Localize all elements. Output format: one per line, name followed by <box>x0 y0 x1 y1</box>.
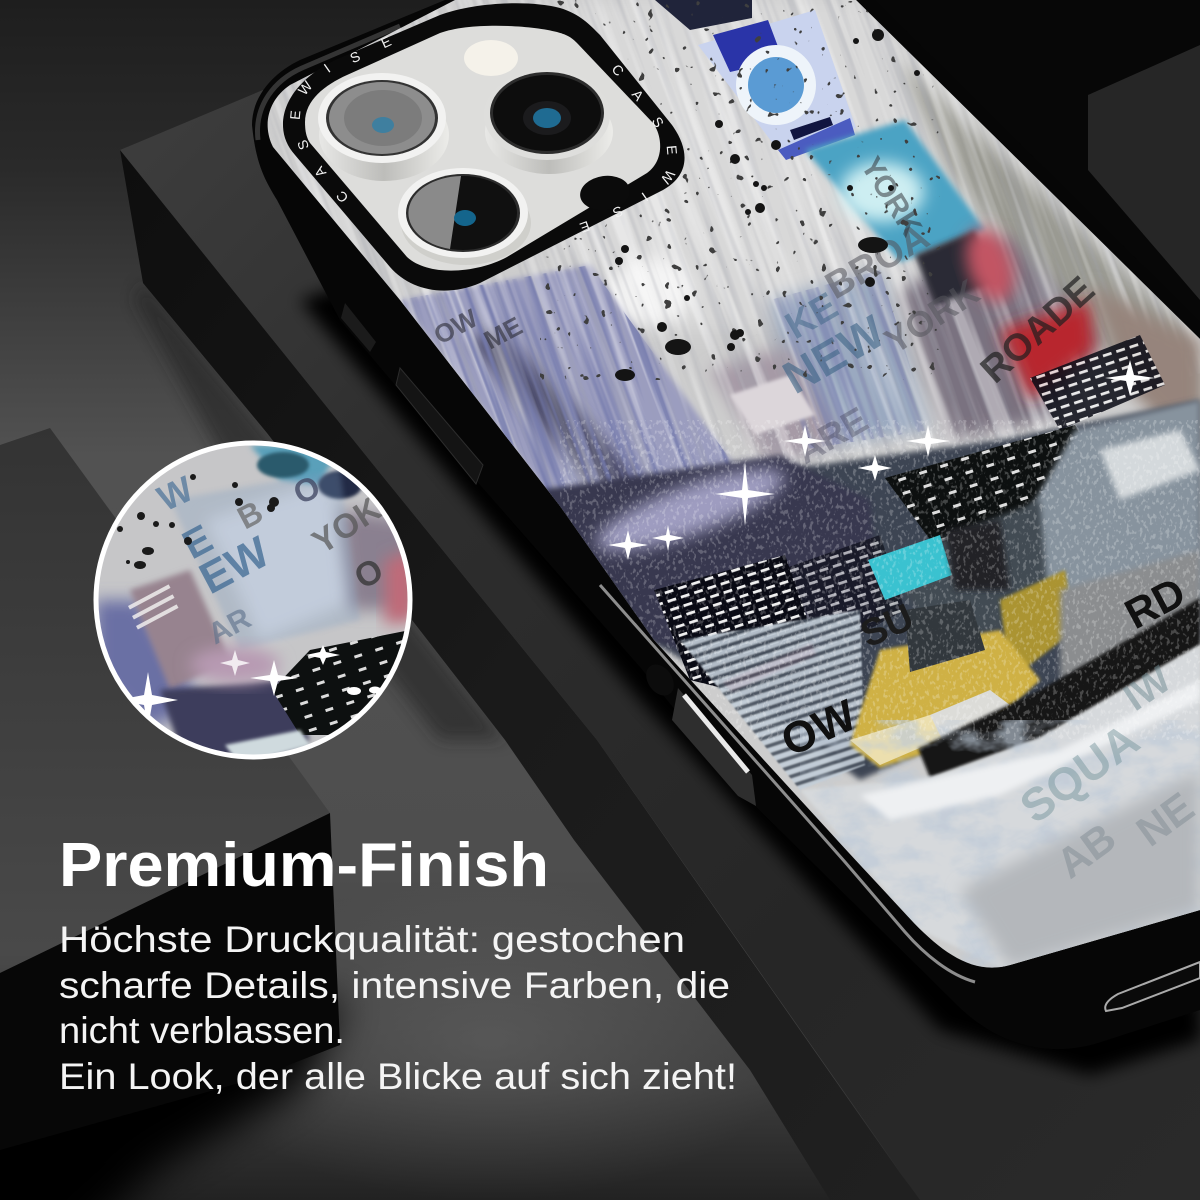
dark mid street <box>940 499 1050 599</box>
circle white bars <box>128 584 178 630</box>
art mid blue column <box>770 270 930 450</box>
brand lettering on ring: W <box>295 77 316 98</box>
circle pink building <box>130 570 230 690</box>
bluish sparkle wash <box>588 453 792 567</box>
brand lettering on ring: A <box>310 163 329 180</box>
grey window block centre <box>789 535 903 644</box>
sparkle lights <box>608 360 1155 560</box>
road grey corner <box>960 770 1200 968</box>
dark top sign <box>655 0 752 30</box>
brand lettering on ring: S <box>294 138 312 152</box>
art dark tower shadow <box>466 324 645 484</box>
left road stripes <box>680 610 865 790</box>
graffiti text: YORK <box>854 151 928 242</box>
taxi <box>850 570 1075 768</box>
graffiti text <box>429 151 1200 887</box>
lower step front <box>0 813 340 1150</box>
pedestal shadow on floor <box>135 283 505 740</box>
white building windows top <box>730 375 815 435</box>
circle base <box>96 443 410 757</box>
art white patch <box>608 258 692 326</box>
dark building band <box>885 425 1080 542</box>
body text <box>59 919 737 1097</box>
circle pink sparkle haze <box>190 647 280 683</box>
window block right <box>1030 335 1165 430</box>
beige brown patch <box>1094 286 1200 412</box>
body line 2: scharfe Details, intensive Farben, die <box>59 965 730 1006</box>
red pink neon <box>957 222 1023 308</box>
title: Premium-Finish <box>59 831 549 900</box>
background: top right dark wall <box>820 0 1200 420</box>
art right grey column <box>902 62 1200 400</box>
circle lower purple street <box>160 680 310 765</box>
circle teal ink blob <box>257 452 309 478</box>
lens two <box>484 70 613 174</box>
mid streak fill <box>774 270 924 448</box>
ink splatter dots <box>615 29 920 381</box>
graffiti text: YORK <box>877 271 987 362</box>
graffiti text: OW <box>774 690 864 766</box>
island window <box>305 26 660 271</box>
phone <box>234 0 1200 1049</box>
brand lettering on ring: E <box>664 145 680 155</box>
night street band left <box>544 451 873 650</box>
circle blue streaks <box>170 470 360 650</box>
teal sign <box>805 120 985 262</box>
side button: chrome power <box>672 688 756 806</box>
graffiti text: SQUA <box>1010 713 1148 833</box>
tower streak fill <box>402 266 729 496</box>
blue sign <box>698 10 856 160</box>
lens one <box>318 73 449 181</box>
chrome button highlight <box>684 695 748 772</box>
brand lettering on ring: S <box>649 114 667 130</box>
circle graffiti: EW <box>192 527 278 604</box>
graffiti text: ME <box>479 310 527 355</box>
circle graffiti: AR <box>203 602 257 651</box>
circle teal top sign <box>250 445 340 485</box>
lens three <box>398 168 531 265</box>
brand lettering on ring: S <box>610 203 626 221</box>
body line 3: nicht verblassen. <box>59 1010 345 1051</box>
background: top right block face <box>1088 45 1200 300</box>
red neon strip <box>724 646 813 690</box>
circle navy blob <box>318 471 362 499</box>
side button: volume <box>396 368 483 484</box>
pedestal dark side face <box>120 150 920 1200</box>
microphone hole <box>578 173 632 213</box>
road blue paint wash <box>800 720 1200 980</box>
circle white diagonal <box>205 480 355 640</box>
brand lettering on ring: W <box>657 167 678 188</box>
streak texture neutral <box>282 0 1112 482</box>
phone shadow <box>300 280 1200 1075</box>
magnified detail circle <box>95 443 415 765</box>
graffiti text: KE <box>778 285 845 348</box>
circle purple left <box>95 600 200 730</box>
art top light wash <box>540 0 1010 330</box>
grey right traffic <box>1060 550 1200 680</box>
circle graffiti <box>151 468 390 651</box>
circle artwork <box>95 445 415 765</box>
teal shop front <box>868 535 952 600</box>
mid right cars <box>1029 399 1200 590</box>
art mid pink building <box>710 345 840 465</box>
circle white outline <box>96 443 410 757</box>
graffiti text: NEW <box>774 305 893 404</box>
phone case body <box>252 0 1200 1049</box>
dark road shadow <box>918 598 1200 778</box>
background: floor light glow <box>180 880 800 1200</box>
light grit over night scene <box>560 420 1200 740</box>
circle sparkles <box>118 645 381 728</box>
case lower edge highlight <box>600 585 975 982</box>
road bright band <box>860 680 1200 820</box>
tower blue streaks <box>402 266 729 496</box>
graffiti text: ROADE <box>973 269 1103 392</box>
circle graffiti: O <box>348 551 390 597</box>
graffiti text: AB <box>1048 814 1124 887</box>
flash <box>464 40 518 76</box>
circle dark street <box>272 630 410 735</box>
body line 1: Höchste Druckqualität: gestochen <box>59 919 685 960</box>
graffiti text: RD <box>1117 568 1193 638</box>
circle graffiti: E <box>176 517 220 568</box>
brand lettering on ring <box>287 33 680 236</box>
side button: action <box>341 303 376 352</box>
circle graffiti: O <box>288 468 326 511</box>
brand lettering on ring: E <box>578 218 592 236</box>
dark shop corner <box>945 520 1010 590</box>
circle purple grey right <box>340 510 415 610</box>
brand lettering on ring: C <box>333 188 351 206</box>
camera island <box>283 3 685 291</box>
light car highlight <box>1100 430 1200 500</box>
ink splatter noise <box>540 0 940 380</box>
graffiti text: IW <box>1117 659 1179 719</box>
art purple grey right <box>900 235 1100 440</box>
brand lettering on ring: E <box>287 110 303 120</box>
circle graffiti: YOK <box>306 489 389 562</box>
circle graffiti: B <box>231 494 269 536</box>
brand lettering on ring: A <box>629 86 648 104</box>
graffiti text: SU <box>855 596 920 656</box>
body line 4: Ein Look, der alle Blicke auf sich zieht! <box>59 1056 737 1097</box>
brand lettering on ring: E <box>378 33 394 51</box>
brand lettering on ring: C <box>609 61 627 79</box>
circle red edge <box>385 550 415 625</box>
circle bottom white <box>225 730 310 765</box>
circle ink splatter <box>117 474 279 569</box>
dark sign patch <box>915 230 1000 305</box>
brand lettering on ring: I <box>639 189 651 205</box>
charging port <box>1105 962 1200 1011</box>
graffiti text: ARE <box>788 398 875 472</box>
mid column streaks <box>774 270 924 448</box>
night street base <box>540 400 1200 780</box>
art base <box>250 0 1200 1000</box>
circle graffiti: W <box>151 468 199 519</box>
graffiti text: OW <box>429 303 483 350</box>
lower step top <box>0 428 330 973</box>
island ring <box>283 3 685 291</box>
brand lettering on ring: I <box>321 60 333 76</box>
printed artwork <box>234 0 1200 1000</box>
case rim highlight upper left <box>258 26 400 140</box>
white window block left <box>654 555 815 690</box>
streak texture light <box>274 0 1200 486</box>
brand lettering on ring: S <box>347 48 363 66</box>
red sign <box>1000 300 1095 400</box>
graffiti text: BROA <box>818 215 936 308</box>
snowy road <box>800 645 1200 972</box>
lower step front soft shadow <box>0 1000 345 1200</box>
side button dark socket <box>640 659 680 701</box>
art left purple tower <box>400 265 745 510</box>
